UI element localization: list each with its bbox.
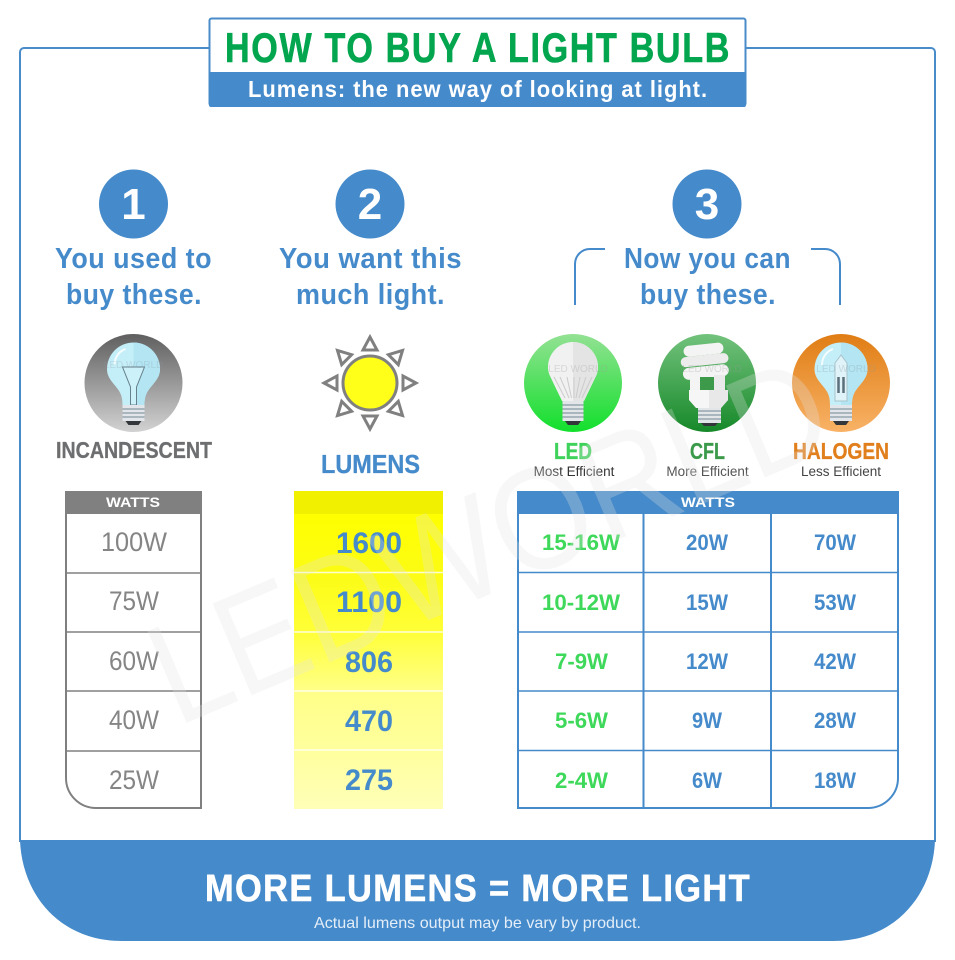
icon: halogen bulb	[792, 334, 890, 432]
LED values: 15-16W	[542, 530, 620, 555]
LED values: 5-6W	[555, 708, 608, 733]
halogen values: 42W	[814, 649, 856, 674]
footer banner: Actual lumens output may be vary by product.	[314, 915, 641, 932]
title banner	[209, 18, 746, 107]
icon: LED bulb: LED WORLD	[548, 364, 608, 375]
LED values: 10-12W	[542, 590, 620, 615]
step 1 heading	[55, 170, 212, 311]
chart: lumens column: 1100	[336, 586, 402, 619]
table: incandescent watts: 40W	[109, 705, 159, 735]
chart: lumens column	[294, 491, 443, 809]
step 2 heading: 2	[358, 180, 382, 229]
halogen values: 18W	[814, 768, 856, 793]
table: modern bulb watts: WATTS	[681, 494, 735, 510]
label: CFL: More Efficient	[666, 464, 749, 479]
label: LED	[534, 438, 615, 479]
label: CFL	[666, 438, 749, 479]
footer banner	[20, 840, 935, 941]
step 3 heading	[575, 170, 840, 311]
step 2 heading: You want this	[279, 243, 462, 275]
step 3 heading: Now you can	[624, 243, 791, 275]
icon: incandescent bulb	[84, 334, 182, 432]
table: incandescent watts: 75W	[109, 586, 159, 616]
icon: incandescent bulb: LED WORLD	[104, 360, 163, 371]
table: incandescent watts: WATTS	[106, 494, 160, 510]
label: lumens: LUMENS	[321, 449, 420, 479]
label: LED: Most Efficient	[534, 464, 615, 479]
halogen values	[814, 530, 856, 793]
step 2 heading: much light.	[296, 279, 445, 311]
table: incandescent watts: 25W	[109, 765, 159, 795]
step 3 heading: 3	[695, 180, 719, 229]
CFL values: 20W	[686, 530, 728, 555]
LED values: 2-4W	[555, 768, 608, 793]
halogen values: 53W	[814, 590, 856, 615]
CFL values: 12W	[686, 649, 728, 674]
subtitle: Lumens: the new way of looking at light.	[248, 76, 708, 102]
icon: halogen bulb: LED WORLD	[816, 364, 876, 375]
icon: sun	[324, 337, 416, 429]
chart: lumens column: 275	[345, 764, 393, 797]
step 2 heading	[279, 170, 462, 311]
CFL values: 9W	[692, 708, 722, 733]
icon: CFL bulb: LED WORLD	[682, 364, 742, 375]
LED values	[542, 530, 620, 793]
label: halogen: Less Efficient	[801, 464, 881, 479]
chart: lumens column: 470	[345, 705, 393, 738]
halogen values: 70W	[814, 530, 856, 555]
label: halogen	[793, 438, 889, 479]
label: halogen: HALOGEN	[793, 438, 889, 464]
CFL values	[686, 530, 728, 793]
icon: LED bulb	[524, 334, 622, 432]
step 1 heading: You used to	[55, 243, 212, 275]
step 1 heading: 1	[121, 180, 146, 229]
icon: CFL bulb	[658, 334, 756, 432]
label: LED: LED	[554, 438, 592, 464]
table: modern bulb watts	[517, 491, 899, 808]
table: incandescent watts: 100W	[101, 527, 167, 557]
label: incandescent: INCANDESCENT	[56, 437, 212, 463]
chart: lumens column: 1600	[336, 527, 402, 560]
CFL values: 15W	[686, 590, 728, 615]
step 1 heading: buy these.	[66, 279, 202, 311]
title: HOW TO BUY A LIGHT BULB	[225, 24, 731, 71]
watermark: LEDWORLD	[126, 325, 852, 756]
outer frame	[20, 48, 935, 842]
step 3 heading: buy these.	[640, 279, 776, 311]
LED values: 7-9W	[555, 649, 608, 674]
table: incandescent watts: 60W	[109, 646, 159, 676]
label: CFL: CFL	[690, 438, 725, 464]
CFL values: 6W	[692, 768, 722, 793]
table: incandescent watts	[65, 491, 202, 808]
chart: lumens column: 806	[345, 646, 393, 679]
footer banner: MORE LUMENS = MORE LIGHT	[205, 868, 751, 910]
halogen values: 28W	[814, 708, 856, 733]
